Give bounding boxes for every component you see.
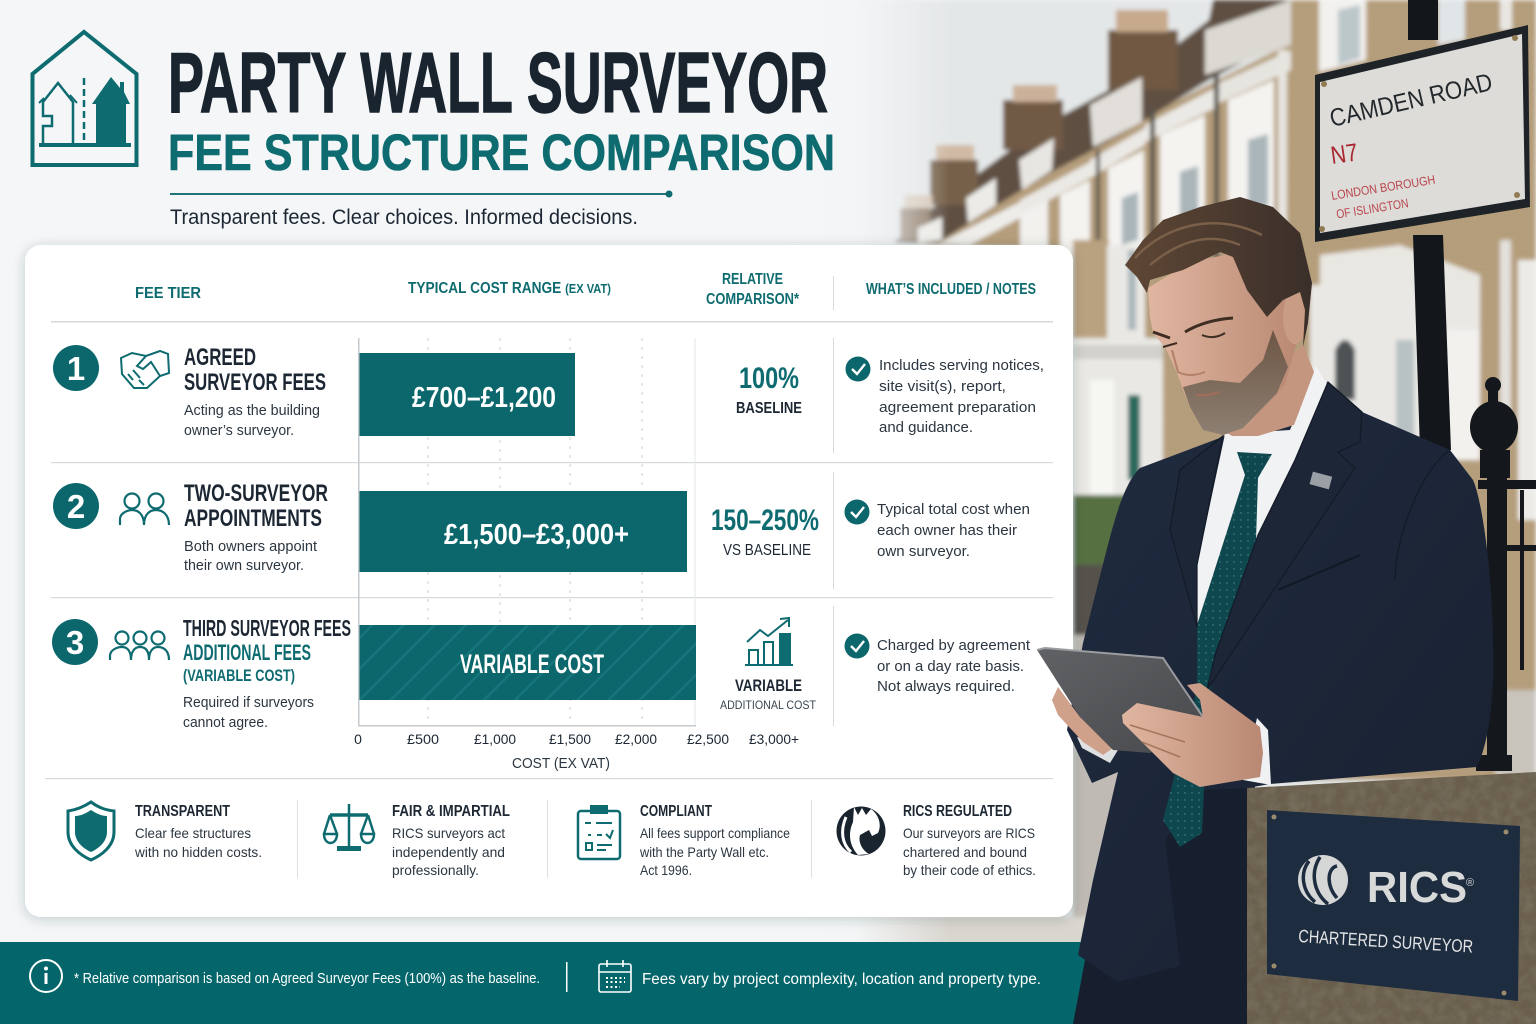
subtitle: Transparent fees. Clear choices. Informed decisions. <box>170 206 638 229</box>
feature text: Our surveyors are RICS <box>903 825 1035 841</box>
relative value <box>736 362 802 417</box>
feature text: independently and <box>392 844 505 860</box>
note <box>846 356 1044 436</box>
nose shadow <box>1172 350 1205 375</box>
axis tick labels: £1,500 <box>549 731 591 747</box>
note: or on a day rate basis. <box>877 658 1024 675</box>
hair <box>1125 197 1312 347</box>
note: Typical total cost when <box>877 501 1030 518</box>
tier name: ADDITIONAL FEES <box>183 640 311 665</box>
icon: three people <box>110 632 169 660</box>
axis tick labels <box>354 731 799 747</box>
footer note: Fees vary by project complexity, location and property type. <box>642 971 1041 988</box>
cost bar: £1,500–£3,000+ <box>444 519 629 551</box>
number badge 1: 1 <box>67 350 85 387</box>
note: agreement preparation <box>879 399 1036 416</box>
feature text: with no hidden costs. <box>134 844 262 860</box>
number badge 1 <box>53 345 99 391</box>
column heading: fee tier: FEE TIER <box>135 285 201 302</box>
title line 2: FEE STRUCTURE COMPARISON <box>168 124 835 181</box>
row 3: third surveyor fees <box>52 615 1031 731</box>
column heading: notes: WHAT’S INCLUDED / NOTES <box>866 281 1036 298</box>
axis title: COST (EX VAT) <box>512 756 610 772</box>
tier description: Acting as the building <box>184 402 320 419</box>
sign text: London Borough of Islington <box>1330 173 1439 222</box>
feature: fair and impartial <box>324 803 510 878</box>
photo background: terraced street <box>790 0 1536 1024</box>
relative value: VARIABLE <box>735 676 802 695</box>
relative value: ADDITIONAL COST <box>720 698 817 712</box>
feature strip dividers <box>297 800 812 878</box>
feature text: COMPLIANT <box>640 803 712 820</box>
tablet <box>1037 648 1203 753</box>
feature text: by their code of ethics. <box>903 862 1036 878</box>
surveyor figure <box>1037 197 1493 1024</box>
tier description <box>183 694 314 731</box>
cost bar: £700–£1,200 <box>412 382 556 414</box>
street sign: Camden Road <box>1315 25 1530 242</box>
relative value: 150–250% <box>711 504 819 537</box>
icon: handshake <box>121 351 169 388</box>
right lapel <box>1207 382 1362 690</box>
trousers <box>1073 775 1255 1024</box>
feature text: FAIR & IMPARTIAL <box>392 803 510 820</box>
axis tick labels: 0 <box>354 731 362 747</box>
sign text: London Borough of Islington: OF ISLINGTON <box>1335 196 1410 221</box>
note: Charged by agreement <box>877 637 1031 654</box>
tier name <box>183 615 351 685</box>
face <box>1148 250 1300 435</box>
neck <box>1215 345 1314 436</box>
column heading: relative comparison <box>706 271 800 308</box>
background fade into page <box>780 0 950 1024</box>
suit jacket <box>1067 382 1493 982</box>
plaque RICS wordmark: RICS <box>1367 863 1467 912</box>
column heading: cost range: TYPICAL COST RANGE (EX VAT) <box>408 280 611 297</box>
title rule with dot <box>170 190 672 198</box>
title line 1: PARTY WALL SURVEYOR <box>168 36 828 131</box>
relative value: VS BASELINE <box>723 542 811 559</box>
note: Not always required. <box>877 678 1015 695</box>
tier name: AGREED <box>184 344 256 371</box>
feature text: Clear fee structures <box>135 825 251 841</box>
feature text <box>392 803 510 878</box>
tier name: (VARIABLE COST) <box>183 666 295 685</box>
left cuff <box>1077 737 1118 763</box>
ear <box>1283 290 1307 344</box>
axis tick labels: £2,000 <box>615 731 657 747</box>
tier name <box>184 344 326 396</box>
relative value: BASELINE <box>736 400 802 417</box>
right hand <box>1122 683 1263 787</box>
icon: clipboard <box>578 805 620 859</box>
lapel pin <box>1310 472 1332 489</box>
column heading: relative comparison: COMPARISON* <box>706 291 800 308</box>
sign text: London Borough of Islington: LONDON BOROUGH <box>1330 173 1436 203</box>
feature text: with the Party Wall etc. <box>639 844 769 860</box>
number badge 2 <box>53 483 99 529</box>
right shirt cuff <box>1243 718 1271 785</box>
tier description: owner’s surveyor. <box>184 422 294 439</box>
tie <box>1163 452 1272 847</box>
feature text: RICS REGULATED <box>903 803 1012 820</box>
note: Includes serving notices, <box>879 357 1044 374</box>
feature text: All fees support compliance <box>640 825 790 841</box>
tier description <box>184 402 320 439</box>
sign text: Camden Road: CAMDEN ROAD <box>1327 68 1495 133</box>
feature text <box>639 803 790 878</box>
tier description: Required if surveyors <box>183 694 314 711</box>
tier description <box>184 538 318 574</box>
tier name: TWO-SURVEYOR <box>184 480 328 507</box>
finger creases <box>1130 725 1185 757</box>
beard <box>1183 330 1288 435</box>
number badge 3 <box>52 619 98 665</box>
iron railing finial and post <box>1470 377 1536 771</box>
left hand <box>1052 687 1113 755</box>
tablet edge <box>1037 648 1203 717</box>
feature text: Act 1996. <box>640 862 692 878</box>
title <box>168 36 835 181</box>
eyes and brows <box>1153 318 1233 347</box>
feature text: RICS surveyors act <box>392 825 505 841</box>
stone pillar <box>1247 772 1536 1024</box>
icon: RICS lion <box>836 806 886 856</box>
cost bar <box>359 491 687 572</box>
icon: scales <box>324 804 374 851</box>
icon: two people <box>120 494 169 525</box>
icon: rising bar chart <box>745 618 793 665</box>
column heading: relative comparison: RELATIVE <box>722 271 783 288</box>
row 2: two-surveyor appointments <box>53 480 1030 574</box>
feature text: TRANSPARENT <box>135 803 230 820</box>
icon: shield <box>68 802 114 860</box>
registered mark: ® <box>1466 877 1474 889</box>
note: own surveyor. <box>877 543 970 560</box>
axis tick labels: £2,500 <box>687 731 729 747</box>
feature: compliant <box>578 803 790 878</box>
relative value <box>720 676 817 712</box>
tier description: Both owners appoint <box>184 538 318 555</box>
plaque lion mark <box>1298 855 1348 905</box>
feature: transparent <box>68 802 262 860</box>
main table card <box>25 245 1073 917</box>
note: and guidance. <box>879 419 973 436</box>
note: site visit(s), report, <box>879 378 1006 395</box>
shirt <box>1197 366 1332 655</box>
tier description: their own surveyor. <box>184 557 304 574</box>
footer band <box>0 942 1095 1024</box>
feature text <box>903 803 1036 878</box>
icon: calendar <box>599 960 631 992</box>
tier name: THIRD SURVEYOR FEES <box>183 615 351 641</box>
number badge 2: 2 <box>67 488 85 525</box>
sleeve seam <box>1395 450 1450 580</box>
street sign post <box>1408 0 1451 450</box>
tier description: cannot agree. <box>183 714 268 731</box>
relative value: 100% <box>739 362 799 395</box>
chart axes <box>358 338 696 726</box>
table header <box>135 271 1036 308</box>
mouth <box>1196 392 1220 395</box>
cost bar, hatched: VARIABLE COST <box>460 649 604 679</box>
sign text: N7: N7 <box>1329 138 1360 170</box>
feature text: chartered and bound <box>903 844 1027 860</box>
house logo icon <box>32 32 136 165</box>
breast pocket <box>1278 555 1360 590</box>
footnote: * Relative comparison is based on Agreed Surveyor Fees (100%) as the baseline. <box>74 971 540 987</box>
cost bar <box>359 353 575 436</box>
relative value <box>711 504 819 559</box>
note: each owner has their <box>877 522 1017 539</box>
icon: info <box>30 960 62 992</box>
RICS plaque <box>1267 810 1520 1001</box>
axis tick labels: £1,000 <box>474 731 516 747</box>
plaque caption: CHARTERED SURVEYOR <box>1298 926 1474 957</box>
axis tick labels: £3,000+ <box>749 731 799 747</box>
feature text: professionally. <box>392 862 479 878</box>
number badge 3: 3 <box>66 624 84 661</box>
feature text <box>134 803 262 860</box>
note <box>844 634 1031 695</box>
axis tick labels: £500 <box>407 731 439 747</box>
tier name: APPOINTMENTS <box>184 505 322 532</box>
cost bar, hatched <box>359 625 696 700</box>
tier name <box>184 480 328 532</box>
tier name: SURVEYOR FEES <box>184 369 326 396</box>
row 1: agreed surveyor fees <box>53 344 1044 439</box>
note <box>844 500 1030 560</box>
feature: RICS regulated <box>836 803 1036 878</box>
left lapel <box>1170 436 1223 627</box>
